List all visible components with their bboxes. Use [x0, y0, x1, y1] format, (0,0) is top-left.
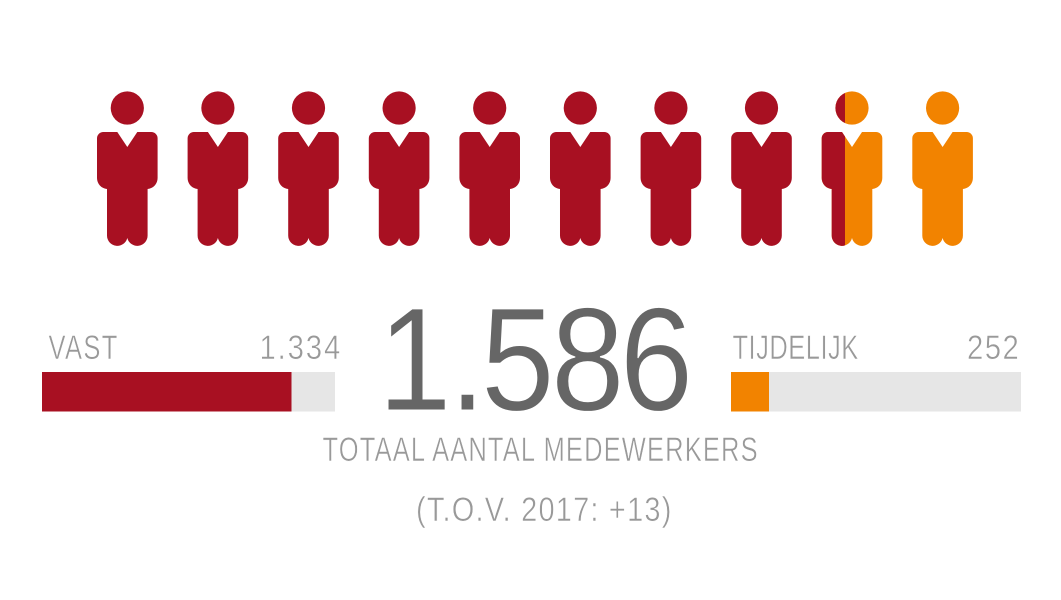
pictogram row of ten people — [97, 91, 973, 246]
panel: tijdelijk — [731, 328, 1021, 412]
caption: change versus 2017: (T.O.V. 2017: +13) — [416, 490, 671, 529]
person 3 — [278, 91, 339, 246]
person 6 — [550, 91, 611, 246]
panel: vast — [42, 328, 340, 412]
bar: tijdelijk fill — [731, 372, 769, 412]
person 10, orange — [912, 91, 973, 246]
caption: total employees: TOTAAL AANTAL MEDEWERKERS — [322, 431, 758, 469]
bar: vast fill — [42, 372, 292, 412]
value: vast: 1.334 — [260, 328, 340, 367]
value: tijdelijk: 252 — [967, 328, 1019, 367]
person 1 — [97, 91, 158, 246]
total number: 1.586 — [378, 277, 693, 442]
person 8 — [731, 91, 792, 246]
person 9, split red and orange — [822, 91, 882, 246]
label: vast: VAST — [48, 329, 117, 367]
person 5 — [459, 91, 520, 246]
label: tijdelijk: TIJDELIJK — [732, 329, 858, 367]
bar: vast track — [42, 372, 335, 412]
person 4 — [369, 91, 429, 246]
person 2 — [188, 91, 248, 246]
person 7 — [641, 91, 701, 246]
bar: tijdelijk track — [731, 372, 1021, 412]
